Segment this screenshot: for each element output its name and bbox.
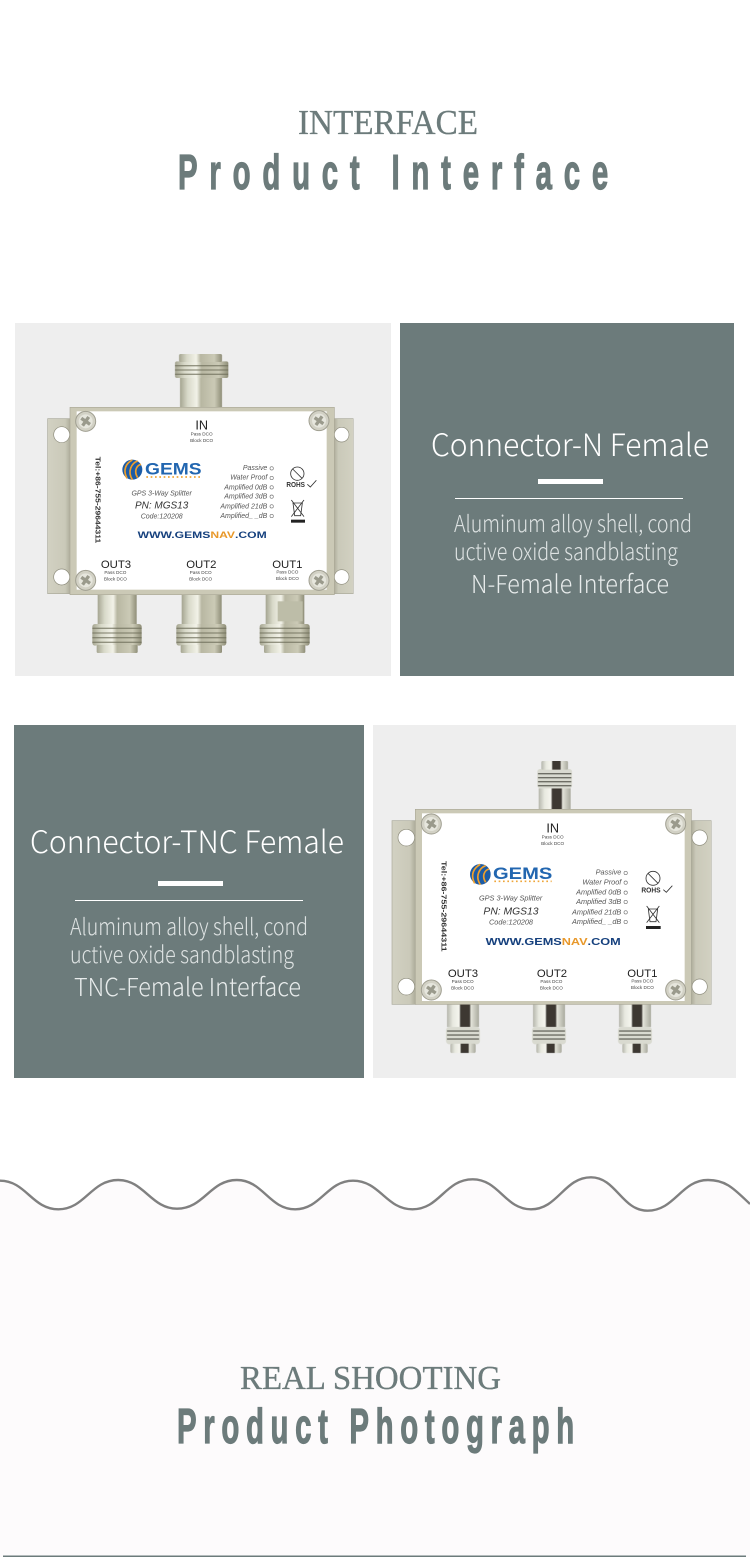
white label bbox=[77, 411, 327, 590]
port labels OUT: OUT2 bbox=[186, 559, 216, 571]
port labels OUT: OUT1 bbox=[272, 559, 302, 571]
wave divider line bbox=[0, 1177, 750, 1211]
mounting flanges bbox=[392, 821, 711, 1004]
wave background section bbox=[0, 1177, 750, 1557]
port labels OUT: OUT3 bbox=[101, 559, 131, 571]
telephone: Tel:+86-755-29644311 bbox=[93, 457, 100, 543]
connector title: Connector-TNC Female bbox=[30, 817, 344, 862]
indicator list: Water Proof bbox=[582, 877, 622, 886]
indicator list: Amplified_ _dB bbox=[219, 513, 268, 520]
port labels OUT: Block DCO bbox=[631, 985, 654, 990]
port label IN bbox=[190, 419, 214, 443]
GEMS logo: GEMS bbox=[493, 864, 552, 883]
icon: WEEE bin bbox=[291, 500, 305, 523]
port labels OUT: Block DCO bbox=[104, 576, 127, 581]
port label IN: Pass DCO bbox=[542, 835, 564, 840]
panel: N connector photo bbox=[15, 323, 391, 676]
icon: ROHS mark: ROHS bbox=[641, 885, 661, 894]
bottom N connectors bbox=[92, 595, 310, 653]
panel: TNC connector description bbox=[14, 725, 364, 1078]
description text: Aluminum alloy shell, cond bbox=[70, 908, 308, 942]
corner screws bbox=[76, 411, 329, 590]
port label IN: IN bbox=[195, 419, 208, 433]
indicator list: Amplified 3dB bbox=[223, 494, 268, 501]
product text bbox=[479, 894, 543, 926]
product photo: TNC female splitter bbox=[392, 761, 711, 1053]
indicator list: Amplified 3dB bbox=[575, 897, 621, 906]
indicator list: Passive bbox=[596, 868, 621, 877]
port labels OUT: Pass DCO bbox=[540, 979, 563, 984]
website: WWW.GEMS NAV.COM bbox=[138, 530, 267, 540]
port labels OUT: OUT3 bbox=[448, 968, 478, 980]
description text: uctive oxide sandblasting bbox=[454, 533, 678, 567]
icon: ROHS mark: ROHS bbox=[286, 480, 305, 489]
port labels OUT: Block DCO bbox=[189, 576, 213, 581]
connector title: Connector-N Female bbox=[431, 420, 709, 465]
port labels OUT bbox=[448, 968, 657, 990]
indicator list: Passive bbox=[243, 465, 267, 472]
top TNC connector bbox=[537, 761, 572, 810]
indicator list: Amplified_ _dB bbox=[571, 917, 621, 926]
GEMS logo bbox=[470, 864, 552, 885]
product text bbox=[131, 490, 193, 520]
product photo: N female splitter bbox=[48, 354, 353, 653]
product text: Code:120208 bbox=[489, 917, 534, 926]
panel: N connector description bbox=[400, 323, 734, 676]
product text: PN: MGS13 bbox=[483, 906, 539, 917]
port label IN: Block DCO bbox=[541, 841, 565, 846]
description text bbox=[70, 908, 308, 1004]
port label IN: Block DCO bbox=[190, 438, 214, 443]
bottom rule bbox=[3, 1556, 746, 1557]
GEMS logo: GEMS bbox=[145, 460, 202, 479]
port labels OUT: Pass DCO bbox=[190, 570, 212, 575]
description text: N-Female Interface bbox=[471, 565, 669, 601]
telephone: Tel:+86-755-29644311 bbox=[439, 861, 446, 952]
description text: Aluminum alloy shell, cond bbox=[454, 505, 692, 539]
indicator list: Water Proof bbox=[230, 475, 268, 482]
port labels OUT: Block DCO bbox=[276, 576, 299, 581]
port label IN bbox=[541, 822, 565, 846]
port labels OUT bbox=[101, 559, 302, 581]
bottom TNC connectors bbox=[446, 1004, 652, 1053]
section heading: real shooting bbox=[177, 1360, 574, 1454]
icon: WEEE bin bbox=[646, 906, 661, 929]
description text bbox=[454, 505, 692, 601]
port labels OUT: Block DCO bbox=[451, 985, 475, 990]
icon: ROHS mark bbox=[641, 871, 672, 894]
port labels OUT: Pass DCO bbox=[452, 979, 474, 984]
product text: GPS 3-Way Splitter bbox=[131, 490, 193, 497]
product text: PN: MGS13 bbox=[135, 500, 189, 511]
splitter body bbox=[415, 809, 691, 1004]
indicator list bbox=[571, 868, 627, 926]
indicator list: Amplified 21dB bbox=[219, 503, 268, 510]
port labels OUT: Block DCO bbox=[540, 985, 563, 990]
GEMS logo bbox=[122, 460, 202, 480]
heading: REAL SHOOTING: REAL SHOOTING bbox=[240, 1360, 501, 1397]
indicator list: Amplified 21dB bbox=[571, 907, 621, 916]
accent bar bbox=[158, 881, 223, 886]
accent bar bbox=[538, 479, 603, 484]
section heading: interface bbox=[178, 103, 608, 200]
indicator list bbox=[219, 465, 273, 520]
white label bbox=[422, 813, 685, 1001]
website: WWW.GEMS NAV.COM bbox=[486, 937, 621, 948]
corner screws bbox=[421, 814, 686, 1000]
description text: TNC-Female Interface bbox=[74, 968, 301, 1004]
product text: GPS 3-Way Splitter bbox=[479, 894, 543, 903]
indicator list: Amplified 0dB bbox=[575, 888, 621, 897]
description text: uctive oxide sandblasting bbox=[70, 936, 294, 970]
panel: TNC connector photo bbox=[373, 725, 736, 1078]
port labels OUT: OUT1 bbox=[627, 968, 657, 980]
mounting flanges bbox=[48, 419, 353, 594]
heading: Product Photograph: Product Photograph bbox=[177, 1398, 574, 1454]
port labels OUT: OUT2 bbox=[537, 968, 567, 980]
heading: Product Interface: Product Interface bbox=[178, 144, 608, 200]
heading: INTERFACE: INTERFACE bbox=[298, 103, 478, 142]
port labels OUT: Pass DCO bbox=[631, 979, 654, 984]
top N connector bbox=[175, 354, 228, 408]
product text: Code:120208 bbox=[141, 513, 183, 520]
splitter body bbox=[70, 407, 334, 595]
port label IN: IN bbox=[546, 822, 559, 836]
indicator list: Amplified 0dB bbox=[223, 484, 268, 491]
port labels OUT: Pass DCO bbox=[276, 570, 299, 575]
port labels OUT: Pass DCO bbox=[104, 570, 127, 575]
icon: ROHS mark bbox=[286, 467, 316, 489]
port label IN: Pass DCO bbox=[191, 431, 213, 436]
